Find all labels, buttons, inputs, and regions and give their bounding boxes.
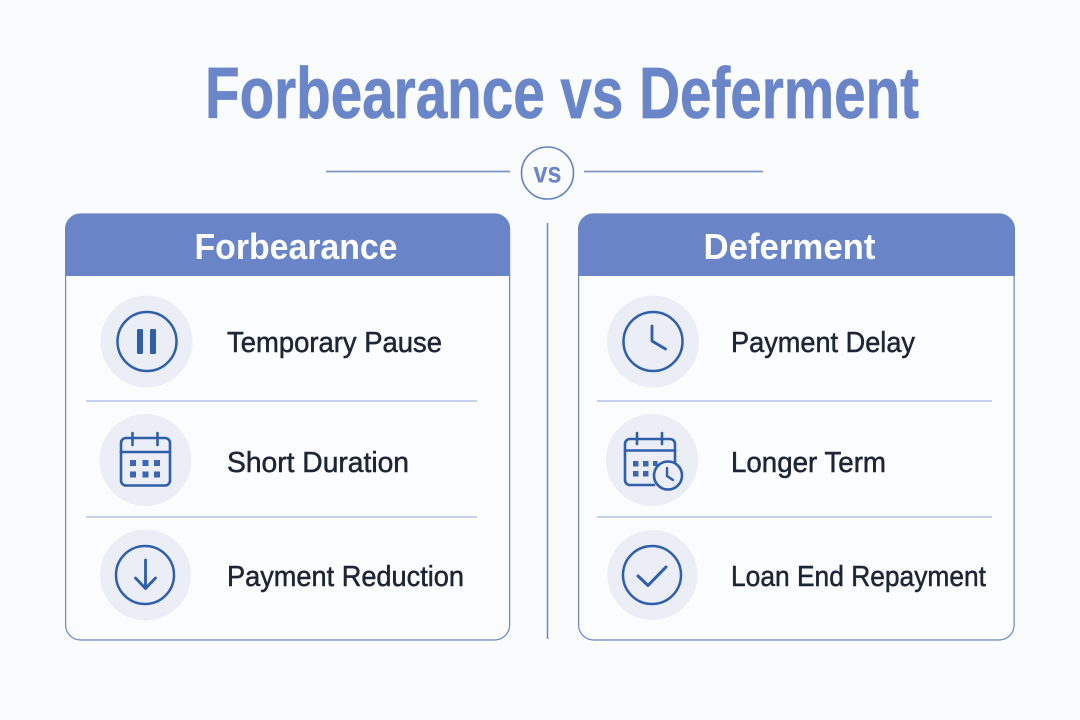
panel header xyxy=(578,214,1015,276)
panel heading: Forbearance xyxy=(194,226,398,267)
label: Short Duration xyxy=(227,447,409,479)
label: Longer Term xyxy=(731,447,886,479)
item: temporary pause xyxy=(100,296,442,388)
item: loan end repayment xyxy=(608,530,986,620)
item: short duration xyxy=(100,414,409,506)
panel header xyxy=(65,214,510,276)
vs divider xyxy=(326,147,763,199)
vs divider: vs xyxy=(534,156,562,190)
icon: clock xyxy=(607,296,699,388)
panel frame xyxy=(66,214,510,640)
panel frame xyxy=(579,214,1014,640)
panel: deferment xyxy=(578,214,1015,640)
icon: check xyxy=(608,530,698,620)
icon: down arrow xyxy=(100,530,191,620)
label: Loan End Repayment xyxy=(731,561,986,593)
label: Payment Reduction xyxy=(227,561,464,593)
icon: calendar xyxy=(100,414,192,506)
panel heading: Deferment xyxy=(704,226,876,267)
icon: pause xyxy=(100,296,192,388)
item: payment reduction xyxy=(100,530,464,620)
label: Payment Delay xyxy=(731,327,916,359)
item: payment delay xyxy=(607,296,916,388)
item: longer term xyxy=(606,414,886,506)
panel: forbearance xyxy=(65,214,510,640)
center divider line xyxy=(546,223,548,639)
icon: calendar with clock xyxy=(606,414,698,506)
label: Temporary Pause xyxy=(227,327,442,359)
